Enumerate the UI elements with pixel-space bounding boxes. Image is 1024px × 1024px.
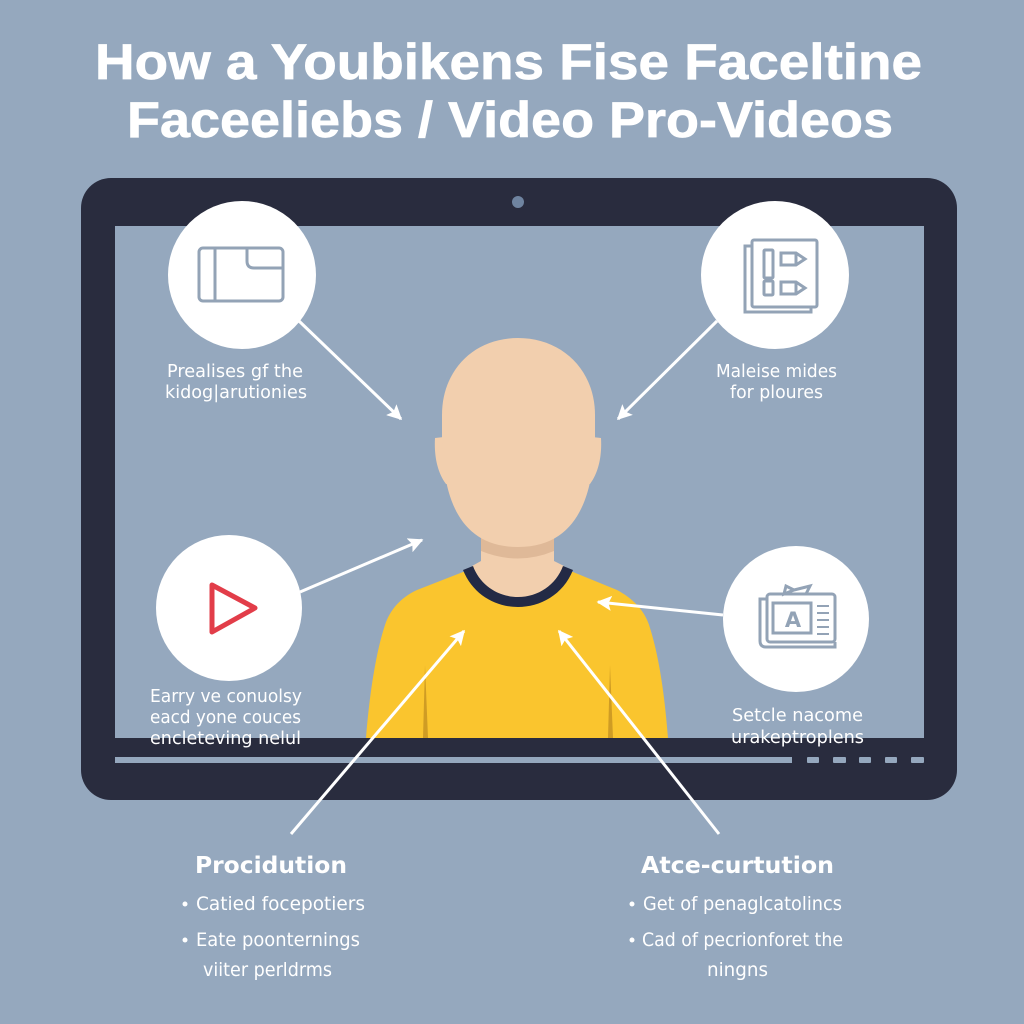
neck shadow xyxy=(481,530,554,558)
text block: Procidution xyxy=(182,853,365,981)
text block: Atce-curtution: ningns xyxy=(707,959,768,981)
title: How a Youbikens Fise Faceltine xyxy=(95,34,922,90)
monitor frame xyxy=(81,178,957,800)
text block: Atce-curtution: Cad of pecrionforet the xyxy=(642,929,843,951)
panel: top right callout xyxy=(701,201,849,403)
caption: for ploures xyxy=(730,382,823,403)
caption: Prealises gf the xyxy=(167,361,303,382)
text block: Procidution: Eate poonternings xyxy=(196,929,360,951)
text block: Procidution: Procidution xyxy=(195,853,347,879)
shirt fold right xyxy=(608,665,613,738)
collar xyxy=(463,566,573,607)
icon: folder window xyxy=(199,248,283,301)
panel: top left callout xyxy=(165,201,316,403)
text block: Atce-curtution xyxy=(630,853,843,981)
title: Faceeliebs / Video Pro-Videos xyxy=(127,92,893,148)
arrows xyxy=(291,321,723,834)
head xyxy=(442,338,595,547)
caption: urakeptroplens xyxy=(731,727,864,748)
caption xyxy=(716,361,837,403)
neck xyxy=(472,530,564,598)
caption: encleteving nelul xyxy=(150,728,301,749)
text block: Procidution: viiter perldrms xyxy=(203,959,332,981)
shirt xyxy=(366,572,668,738)
text block: Atce-curtution: Get of penaglcatolincs xyxy=(643,893,842,915)
circle xyxy=(701,201,849,349)
panel: bottom left callout xyxy=(150,535,302,749)
circle xyxy=(168,201,316,349)
caption: Earry ve conuolsy xyxy=(150,686,302,707)
panel: bottom right callout xyxy=(723,546,869,748)
caption xyxy=(731,705,864,748)
caption xyxy=(165,361,307,403)
text block: Atce-curtution: Atce-curtution xyxy=(641,853,834,879)
ears xyxy=(435,437,601,484)
caption: kidog|arutionies xyxy=(165,382,307,403)
icon: play xyxy=(212,585,255,632)
icon letter: A xyxy=(785,608,802,632)
person figure xyxy=(366,338,668,738)
progress bar xyxy=(115,757,924,763)
circle xyxy=(723,546,869,692)
caption: eacd yone couces xyxy=(150,707,301,728)
caption: Setcle nacome xyxy=(732,705,863,726)
text block: Procidution: Catied focepotiers xyxy=(196,893,365,915)
title xyxy=(95,34,922,148)
shirt fold left xyxy=(423,665,428,738)
caption xyxy=(150,686,302,749)
circle xyxy=(156,535,302,681)
icon: news cards xyxy=(760,586,835,647)
icon: document stack xyxy=(745,240,817,312)
caption: Maleise mides xyxy=(716,361,837,382)
